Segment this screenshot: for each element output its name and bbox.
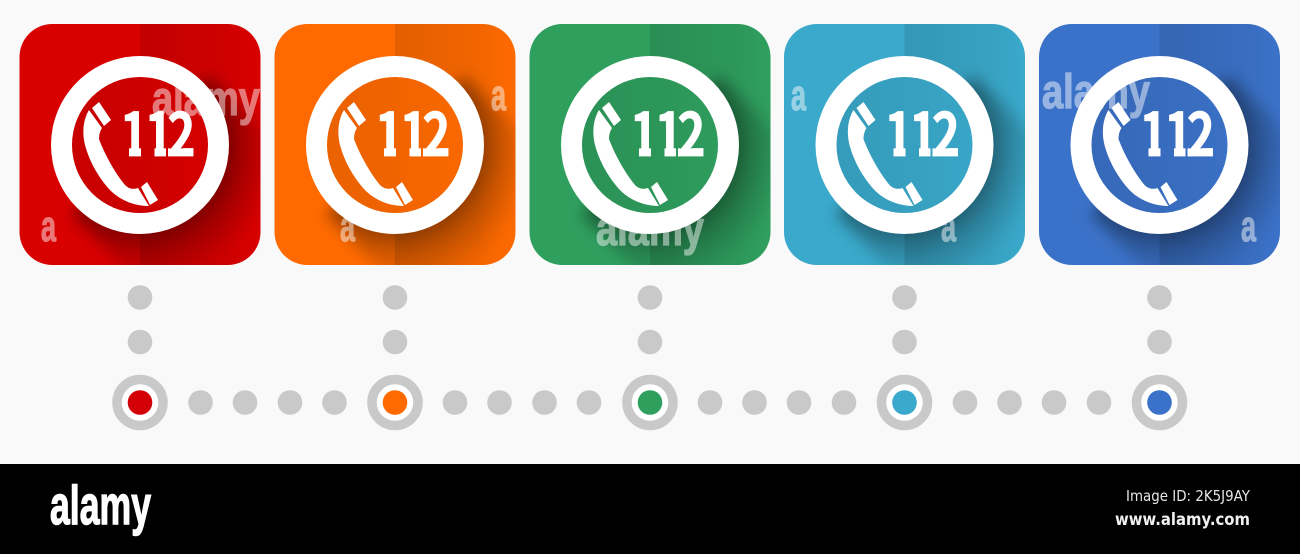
watermarks over the tiles	[41, 66, 1256, 256]
watermarks over the tiles: a	[941, 202, 956, 251]
watermarks over the tiles: a	[340, 202, 355, 251]
footer bar	[0, 464, 1300, 554]
watermarks over the tiles: a	[491, 71, 506, 120]
icon: red 112 phone tile: 112	[120, 86, 196, 174]
icon: green 112 phone tile	[530, 24, 770, 265]
icon: teal 112 phone tile	[784, 24, 1025, 265]
footer image id: Image ID: 2K5J9AY	[1126, 487, 1251, 505]
footer logo: alamy	[50, 474, 151, 536]
icon: blue 112 phone tile: 112	[1139, 86, 1215, 174]
connector dots: vertical pairs	[128, 285, 1172, 354]
connector dots: horizontal timeline	[188, 390, 1111, 415]
icon: orange 112 phone tile: 112	[375, 86, 451, 174]
watermarks over the tiles: a	[1241, 202, 1256, 251]
timeline node: teal	[882, 380, 928, 426]
icon: blue 112 phone tile	[1039, 24, 1280, 265]
timeline node: blue	[1136, 380, 1182, 426]
icon: orange 112 phone tile	[274, 24, 516, 265]
watermarks over the tiles: alamy	[152, 73, 260, 126]
watermarks over the tiles: alamy	[596, 203, 704, 256]
watermarks over the tiles: alamy	[1042, 66, 1150, 119]
timeline node: red	[117, 380, 163, 426]
watermarks over the tiles: a	[791, 71, 806, 120]
timeline node: orange	[372, 380, 418, 426]
watermarks over the tiles: a	[41, 202, 56, 251]
timeline node: green	[627, 380, 673, 426]
icon: teal 112 phone tile: 112	[884, 86, 960, 174]
footer website: www.alamy.com	[1115, 510, 1250, 529]
icon: red 112 phone tile	[20, 24, 260, 265]
icon: green 112 phone tile: 112	[630, 86, 706, 174]
